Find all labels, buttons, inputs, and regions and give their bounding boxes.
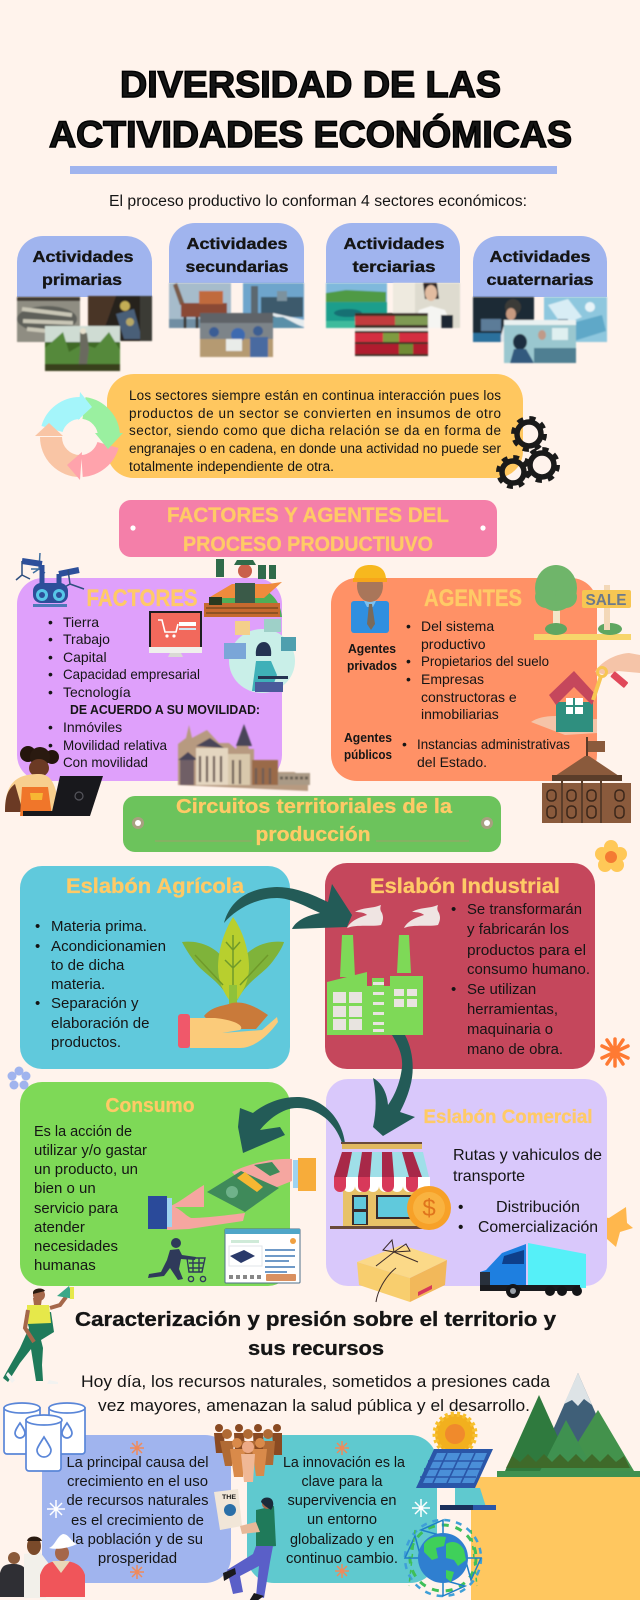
list: agentes privados: Propietarios del suelo — [421, 653, 549, 669]
panel: consumo — [20, 1082, 290, 1286]
icon: water barrels — [4, 1403, 85, 1471]
icon: historic town — [178, 724, 310, 791]
icon: yellow flower — [595, 840, 627, 872]
icon: government building — [542, 737, 631, 823]
icon: robot arms — [16, 553, 84, 607]
list: industrial: Se utilizan — [467, 981, 536, 998]
list: factores: DE ACUERDO A SU MOVILIDAD: — [70, 702, 260, 717]
heading: circuitos territoriales: Circuitos territoriales de la — [176, 796, 453, 818]
text: innovación: clave para la — [302, 1473, 383, 1490]
heading: factores y agentes: PROCESO PRODUCTIUVO — [183, 533, 433, 556]
list: agrícola: productos. — [51, 1034, 121, 1051]
heading: factores y agentes: FACTORES Y AGENTES DEL — [167, 504, 449, 527]
panel: actividades primarias: primarias — [42, 272, 122, 289]
icon: shop monitor — [149, 611, 202, 657]
panel: factores: FACTORES — [86, 585, 198, 612]
list: agentes privados: • — [406, 618, 411, 634]
list: industrial — [451, 901, 590, 1058]
heading: circuitos territoriales: producción — [256, 824, 370, 846]
text: principal causa: es el crecimiento de — [71, 1512, 204, 1529]
text: innovación — [283, 1454, 406, 1567]
text: rutas — [453, 1147, 602, 1185]
arrow: comercial to consumo — [238, 1097, 345, 1153]
photos: tourism, professional, supermarket — [326, 283, 460, 356]
callout: interaction of sectors: Los sectores siempre están en continua interacción pues los — [129, 388, 501, 403]
title underline — [70, 166, 557, 174]
panel: eslabón comercial — [326, 1079, 607, 1286]
text: definition of consumption: necesidades — [34, 1238, 118, 1255]
icon: storefront — [330, 1142, 451, 1230]
list: comercial — [458, 1199, 598, 1236]
icon: man holding poster — [214, 1489, 276, 1600]
text: definition of consumption: atender — [34, 1219, 85, 1236]
icon: trees and sale sign: SALE — [586, 592, 627, 609]
icon: hands exchanging money — [148, 1158, 316, 1230]
callout: interaction of sectors: sector, siendo como que dicha relación se da en forma de — [129, 423, 501, 438]
icon: trees and sale sign — [534, 565, 631, 640]
panel: factores — [17, 578, 282, 781]
panel: actividades secundarias — [169, 223, 304, 357]
list: factores: • — [48, 649, 53, 665]
list: agentes públicos: Instancias administrativas — [417, 736, 570, 752]
panel: actividades cuaternarias: cuaternarias — [486, 272, 594, 289]
list: factores — [48, 614, 260, 770]
list: factores: • — [48, 666, 53, 682]
panel: actividades cuaternarias — [473, 236, 607, 363]
arrow: industrial to comercial — [373, 1035, 415, 1136]
callout: interaction of sectors — [107, 374, 523, 478]
list: factores: Tecnología — [63, 684, 131, 700]
icon: bar — [440, 1505, 496, 1510]
text: innovación: continuo cambio. — [286, 1550, 398, 1567]
panel: agentes: AGENTES — [424, 585, 522, 612]
panel: actividades primarias: Actividades — [32, 249, 134, 266]
text: rutas: transporte — [453, 1168, 525, 1185]
list: agrícola: Materia prima. — [51, 918, 147, 935]
text: definition of consumption: bien o un — [34, 1180, 96, 1197]
icon: man holding poster: THE — [222, 1495, 236, 1501]
list: agentes públicos — [402, 736, 570, 770]
text: definition of consumption: un producto, un — [34, 1161, 138, 1178]
list: agentes privados: productivo — [421, 636, 486, 652]
list: factores: Tierra — [63, 614, 99, 630]
icon: dollar coin: $ — [422, 1195, 436, 1222]
list: agentes privados: • — [406, 653, 411, 669]
list: factores: Inmóviles — [63, 719, 122, 735]
text: principal causa — [66, 1454, 208, 1567]
list: factores: • — [48, 719, 53, 735]
panel: eslabón agrícola: Eslabón Agrícola — [66, 875, 244, 898]
text: principal causa: crecimiento en el uso — [67, 1473, 208, 1490]
icon: factory — [327, 905, 440, 1035]
icon: blue flower — [8, 1066, 30, 1090]
list: industrial: consumo humano. — [467, 961, 590, 978]
icon: cycle arrows — [35, 392, 123, 480]
panel: actividades cuaternarias: Actividades — [490, 249, 591, 266]
list: agrícola: elaboración de — [51, 1015, 149, 1032]
title — [49, 64, 572, 155]
icon: sun — [435, 1414, 475, 1454]
list: factores: Trabajo — [63, 631, 110, 647]
list: agrícola: Separación y — [51, 995, 139, 1012]
icon: farmer — [204, 559, 282, 617]
text: definition of consumption: humanas — [34, 1257, 96, 1274]
text: presiones sobre recursos — [81, 1372, 551, 1415]
panel: causa del crecimiento — [42, 1435, 231, 1583]
text: principal causa: La principal causa del — [66, 1454, 208, 1471]
list: industrial: • — [451, 901, 456, 918]
list: factores: Capital — [63, 649, 107, 665]
callout: interaction of sectors: totalmente independiente de otra. — [129, 459, 334, 474]
list: agrícola — [35, 918, 166, 1051]
panel: actividades secundarias: Actividades — [186, 236, 288, 253]
icon: crowd — [214, 1424, 282, 1482]
label: agentes privados — [347, 641, 397, 673]
icon: person with megaphone — [3, 1286, 74, 1384]
list: factores: • — [48, 737, 53, 753]
icon: solar panel — [416, 1449, 493, 1488]
icon: shopper with cart — [148, 1238, 206, 1282]
panel: eslabón comercial: Eslabón Comercial — [424, 1107, 592, 1128]
list: agentes públicos: del Estado. — [417, 754, 487, 770]
text: presiones sobre recursos: Hoy día, los recursos naturales, sometidos a presiones cada — [81, 1372, 551, 1391]
label: agentes públicos: Agentes — [344, 730, 392, 745]
icon: product web page — [225, 1229, 300, 1283]
panel: agentes — [331, 578, 597, 781]
text: innovación: globalizado y en — [290, 1531, 394, 1548]
title: DIVERSIDAD DE LAS — [120, 64, 501, 105]
text: definition of consumption: servicio para — [34, 1200, 119, 1217]
heading: circuitos territoriales — [123, 796, 501, 852]
icon: construction worker — [351, 565, 389, 633]
list: agrícola: • — [35, 918, 40, 935]
list: agrícola: to de dicha — [51, 957, 125, 974]
text: principal causa: de recursos naturales — [66, 1492, 208, 1509]
icon: teal stand — [455, 1488, 486, 1507]
icon: orange star — [595, 1207, 633, 1247]
list: agrícola: • — [35, 995, 40, 1012]
label: agentes privados: Agentes — [348, 641, 396, 656]
panel: actividades primarias — [17, 236, 152, 371]
list: agentes privados: • — [406, 671, 411, 687]
title: ACTIVIDADES ECONÓMICAS — [49, 113, 572, 155]
list: factores: • — [48, 614, 53, 630]
panel: innovación — [247, 1435, 437, 1583]
heading: caracterización y presión — [75, 1309, 557, 1360]
list: industrial: herramientas, — [467, 1001, 558, 1018]
icon: gears — [498, 418, 558, 487]
list: industrial: mano de obra. — [467, 1041, 563, 1058]
icon: mountains and orange block — [471, 1373, 640, 1600]
panel: eslabón industrial — [325, 863, 595, 1069]
list: industrial: • — [451, 981, 456, 998]
panel: actividades secundarias: secundarias — [186, 259, 289, 276]
list: agrícola: materia. — [51, 976, 105, 993]
panel: actividades terciarias: terciarias — [352, 259, 436, 276]
text: rutas: Rutas y vahiculos de — [453, 1147, 602, 1164]
list: agentes privados: inmobiliarias — [421, 706, 499, 722]
icon: plant in hand — [178, 917, 284, 1048]
list: comercial: • — [458, 1219, 463, 1236]
label: agentes privados: privados — [347, 658, 397, 673]
list: agrícola: • — [35, 938, 40, 955]
icon: globe with people — [405, 1520, 481, 1596]
photos: research and technology — [473, 297, 607, 363]
panel: eslabón industrial: Eslabón Industrial — [370, 875, 560, 898]
icon: asterisk — [602, 1039, 628, 1066]
icon: girl with laptop — [5, 746, 103, 816]
list: industrial: y fabricarán los — [467, 921, 569, 938]
text: innovación: supervivencia en — [288, 1492, 396, 1509]
list: factores: • — [48, 631, 53, 647]
text: principal causa: la población y de su — [72, 1531, 203, 1548]
list: agentes privados: constructoras e — [421, 689, 517, 705]
list: agentes privados — [406, 618, 549, 722]
heading: caracterización y presión: sus recursos — [248, 1338, 384, 1360]
icon: peasants — [0, 1534, 85, 1598]
list: industrial: maquinaria o — [467, 1021, 553, 1038]
list: factores: Capacidad empresarial — [63, 666, 200, 682]
panel: eslabón agrícola — [20, 866, 290, 1069]
list: factores: Movilidad relativa — [63, 737, 167, 753]
list: comercial: Distribución — [496, 1199, 580, 1216]
panel: consumo: Consumo — [106, 1095, 194, 1117]
panel: actividades terciarias — [326, 223, 460, 356]
list: comercial: • — [458, 1199, 463, 1216]
callout: interaction of sectors: engranajes o en cadena, en donde una actividad no puede ser — [129, 441, 502, 456]
text: presiones sobre recursos: vez mayores, amenazan la salud pública y el desarrollo. — [98, 1396, 530, 1415]
panel: actividades terciarias: Actividades — [344, 236, 445, 253]
text: innovación: La innovación es la — [283, 1454, 406, 1471]
list: agentes públicos: • — [402, 736, 407, 752]
list: factores: Con movilidad — [63, 754, 148, 770]
list: agentes privados: Del sistema — [421, 618, 494, 634]
heading: factores y agentes — [119, 500, 497, 557]
icon: house and keys in hands — [531, 653, 640, 735]
icon: gift parcel — [357, 1240, 447, 1302]
list: agentes privados: Empresas — [421, 671, 484, 687]
text: definition of consumption: Es la acción de — [34, 1123, 132, 1140]
text: innovación: un entorno — [307, 1511, 377, 1528]
photos: oil rig, refinery, factory floor — [169, 283, 304, 357]
text: definition of consumption — [34, 1123, 147, 1274]
callout: interaction of sectors: productos de un sector se convierten en insumos de otro — [129, 406, 501, 421]
heading: caracterización y presión: Caracterización y presión sobre el territorio y — [75, 1309, 557, 1331]
list: agrícola: Acondicionamien — [51, 938, 166, 955]
text: definition of consumption: utilizar y/o gastar — [34, 1142, 147, 1159]
icon: truck — [480, 1243, 586, 1298]
arrow: agrícola to industrial — [224, 884, 352, 929]
list: factores: • — [48, 684, 53, 700]
list: industrial: productos para el — [467, 942, 586, 959]
list: industrial: Se transformarán — [467, 901, 582, 918]
list: comercial: Comercialización — [478, 1219, 598, 1236]
icon: online worker — [224, 619, 296, 693]
label: agentes públicos: públicos — [344, 747, 392, 762]
photos: fishing, mining, farming — [17, 296, 152, 371]
text: principal causa: prosperidad — [98, 1550, 177, 1567]
label: agentes públicos — [344, 730, 392, 762]
intro sentence: El proceso productivo lo conforman 4 sectores económicos: — [109, 193, 527, 210]
